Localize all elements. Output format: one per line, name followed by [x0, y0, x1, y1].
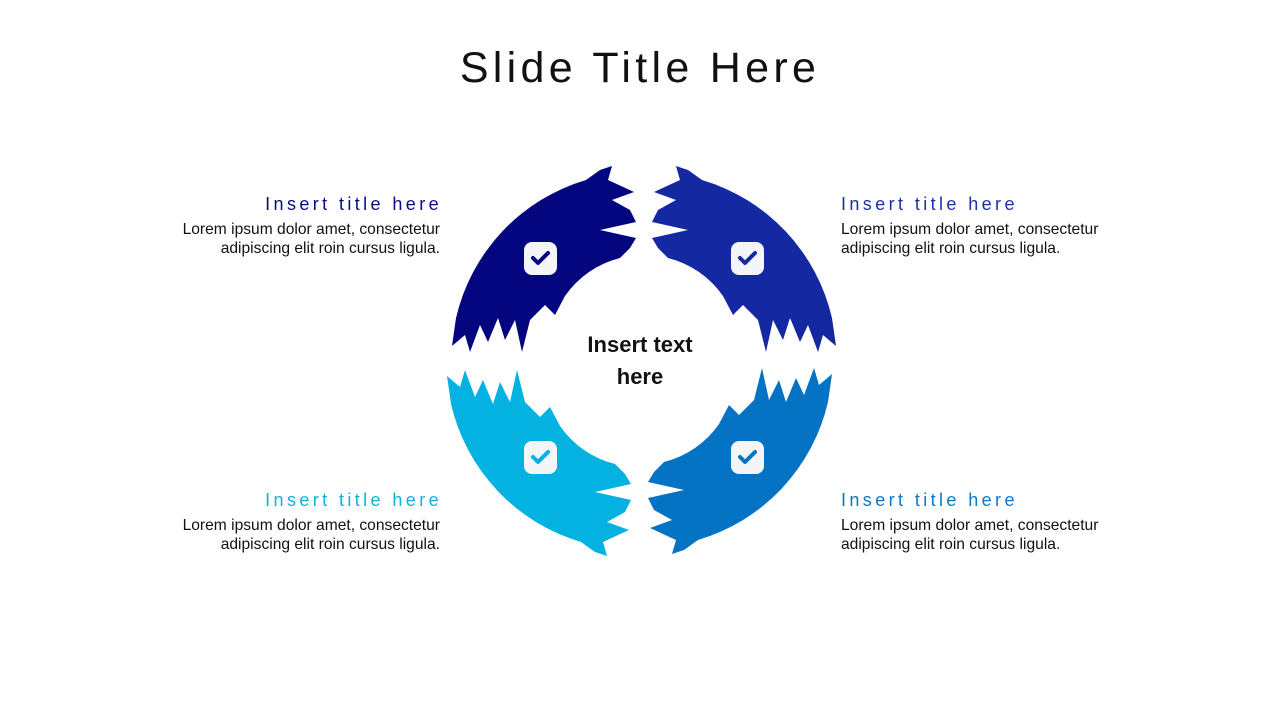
- text: adipiscing elit roin cursus ligula.: [841, 536, 1060, 553]
- icon: check bottom-right: [731, 441, 764, 474]
- text: [841, 517, 1098, 553]
- text: Lorem ipsum dolor amet, consectetur: [183, 517, 440, 534]
- text: adipiscing elit roin cursus ligula.: [221, 536, 440, 553]
- shape: top-right brush: [652, 166, 836, 352]
- heading: Insert title here: [265, 490, 442, 510]
- block: bottom-left: [183, 490, 442, 553]
- shape: top-left brush: [452, 166, 636, 352]
- text: adipiscing elit roin cursus ligula.: [221, 240, 440, 257]
- icon: check top-left: [524, 242, 557, 275]
- text: [183, 221, 440, 257]
- title: Slide Title Here: [460, 44, 820, 92]
- heading: Insert title here: [265, 194, 442, 214]
- center text: Insert text: [587, 332, 693, 357]
- center text: here: [617, 364, 663, 389]
- shape: bottom-left brush: [447, 370, 631, 556]
- icon: check bottom-left: [524, 441, 557, 474]
- text: Lorem ipsum dolor amet, consectetur: [183, 221, 440, 238]
- heading: Insert title here: [841, 490, 1018, 510]
- text: Lorem ipsum dolor amet, consectetur: [841, 517, 1098, 534]
- icon: check top-right: [731, 242, 764, 275]
- text: [183, 517, 440, 553]
- block: top-left: [183, 194, 442, 257]
- text: adipiscing elit roin cursus ligula.: [841, 240, 1060, 257]
- block: bottom-right: [841, 490, 1098, 553]
- block: top-right: [841, 194, 1098, 257]
- center text: [587, 332, 693, 389]
- heading: Insert title here: [841, 194, 1018, 214]
- text: Lorem ipsum dolor amet, consectetur: [841, 221, 1098, 238]
- shape: bottom-right brush: [648, 368, 832, 554]
- text: [841, 221, 1098, 257]
